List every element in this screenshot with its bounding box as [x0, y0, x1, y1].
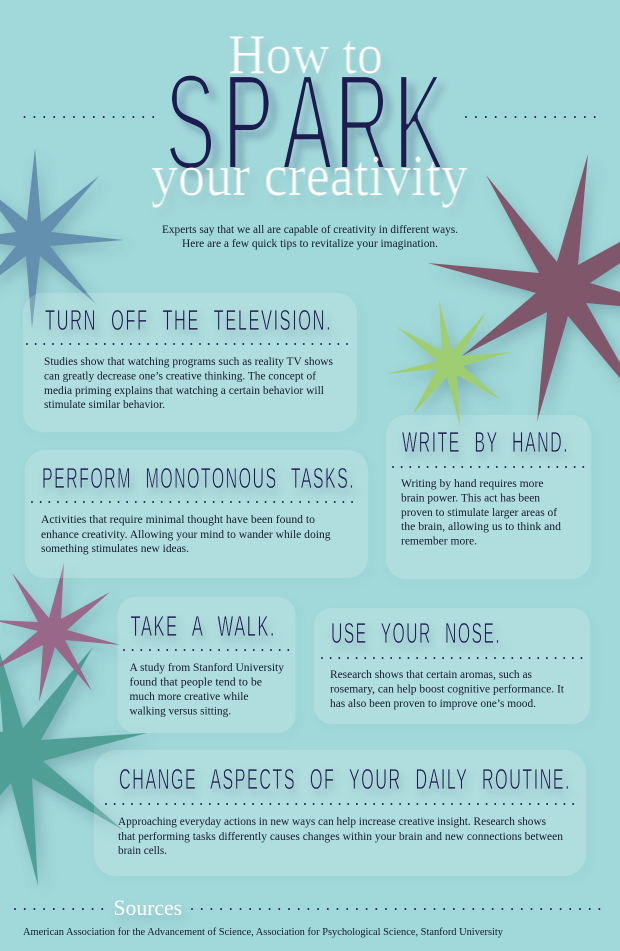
star: green — [386, 300, 512, 426]
panel: change aspects of your daily routine — [94, 750, 586, 876]
body text: Approaching everyday actions in new ways can help increase creative insight. Research shows — [118, 814, 546, 828]
body text: much more creative while — [130, 689, 248, 703]
panel: take a walk — [118, 597, 296, 733]
body text: something stimulates new ideas. — [41, 541, 189, 555]
body text: can greatly decrease one’s creative thinking. The concept of — [44, 368, 316, 382]
body text: walking versus sitting. — [130, 704, 231, 718]
body text: A study from Stanford University — [130, 660, 284, 674]
star: maroon — [428, 154, 620, 422]
body text: brain cells. — [118, 843, 167, 857]
body text: Studies show that watching programs such as reality TV shows — [44, 354, 333, 368]
intro text — [162, 222, 458, 250]
body text: rosemary, can help boost cognitive performance. It — [330, 682, 565, 696]
panel: write by hand — [386, 415, 591, 579]
heading: TURN OFF THE TELEVISION. — [45, 305, 332, 337]
body text: enhance creativity. Allowing your mind to wander while doing — [41, 527, 330, 541]
body text — [330, 667, 565, 710]
sources list: American Association for the Advancement of Science, Association for Psychological Science, Stanford University — [23, 926, 503, 938]
body text: media priming explains that watching a certain behavior will — [44, 383, 325, 397]
title: your creativity: your creativity — [151, 143, 468, 208]
body text — [401, 476, 561, 548]
sources heading: Sources — [114, 895, 182, 920]
body text — [118, 814, 563, 857]
heading: TAKE A WALK. — [130, 611, 276, 643]
body text: stimulate similar behavior. — [44, 397, 165, 411]
panel: turn off the television — [23, 293, 357, 432]
title: spark: SPARK — [165, 44, 445, 199]
heading: PERFORM MONOTONOUS TASKS. — [42, 463, 355, 495]
body text — [41, 512, 330, 555]
intro text: Experts say that we all are capable of creativity in different ways. — [162, 222, 458, 236]
title: how to: How to — [228, 24, 383, 86]
star: blue — [0, 148, 124, 329]
body text: Research shows that certain aromas, such as — [330, 667, 532, 681]
body text: has also been proven to improve one’s mood. — [330, 696, 536, 710]
body text — [44, 354, 333, 411]
star: teal — [0, 640, 147, 886]
intro text: Here are a few quick tips to revitalize your imagination. — [182, 236, 438, 250]
body text: brain power. This act has been — [401, 490, 540, 504]
body text: proven to stimulate larger areas of — [401, 505, 557, 519]
star: pink — [0, 563, 120, 702]
body text — [130, 660, 284, 718]
body text: remember more. — [401, 534, 477, 548]
panel: use your nose — [314, 608, 590, 724]
body text: Activities that require minimal thought have been found to — [41, 512, 315, 526]
body text: Writing by hand requires more — [401, 476, 544, 490]
panel: perform monotonous tasks — [25, 450, 368, 578]
body text: the brain, allowing us to think and — [401, 519, 561, 533]
body text: that performing tasks differently causes changes within your brain and new connections between — [118, 829, 563, 843]
body text: found that people tend to be — [130, 674, 262, 688]
